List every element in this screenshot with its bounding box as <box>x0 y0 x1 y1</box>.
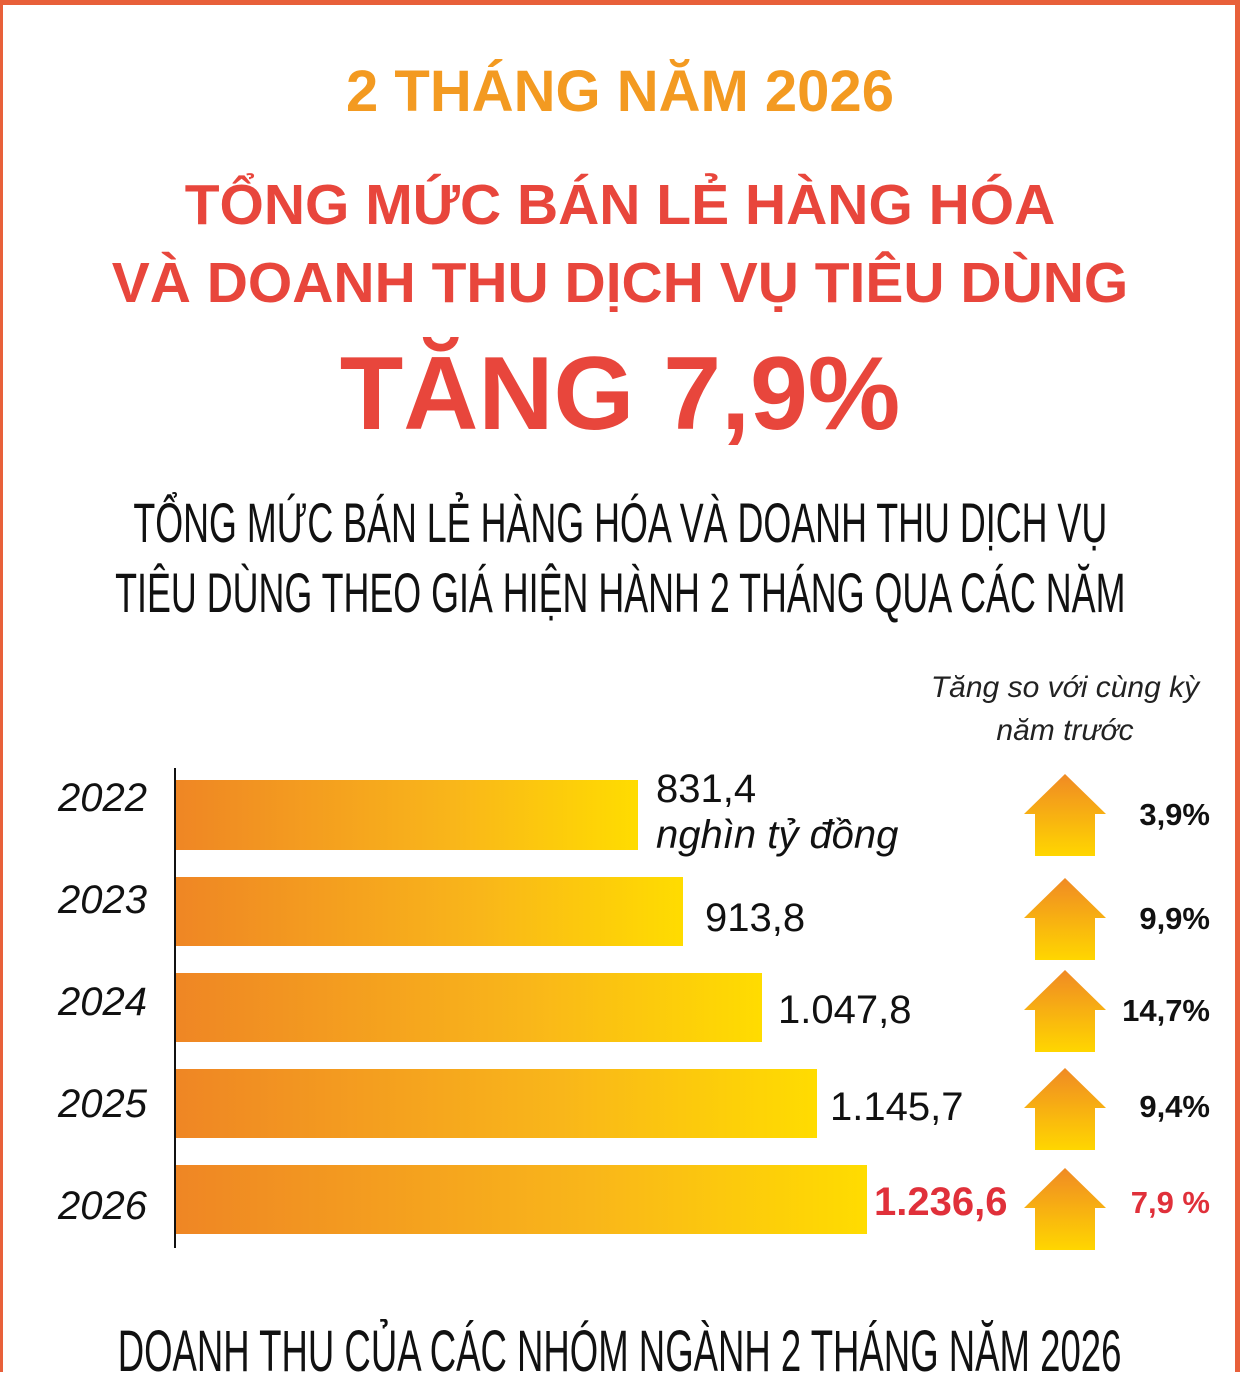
bar chart: 2022 <box>58 776 147 820</box>
title: main: TỔNG MỨC BÁN LẺ HÀNG HÓA <box>185 173 1055 237</box>
bar chart: 831,4 <box>656 767 756 811</box>
arrow 2026 <box>1024 1168 1210 1250</box>
subtitle: TỔNG MỨC BÁN LẺ HÀNG HÓA VÀ DOANH THU DỊCH VỤ <box>133 491 1107 554</box>
row 2023 <box>58 877 805 946</box>
arrow 2024 <box>1024 970 1210 1052</box>
row 2022 <box>58 767 898 857</box>
row 2026 <box>58 1165 1007 1234</box>
growth arrows: 14,7% <box>1122 993 1210 1028</box>
growth arrows: 3,9% <box>1139 797 1210 832</box>
bar chart <box>58 767 1007 1248</box>
legend note <box>931 671 1201 747</box>
title: period: 2 THÁNG NĂM 2026 <box>346 59 894 124</box>
section heading: DOANH THU CỦA CÁC NHÓM NGÀNH 2 THÁNG NĂM 2026 <box>118 1319 1122 1384</box>
title: main: VÀ DOANH THU DỊCH VỤ TIÊU DÙNG <box>112 251 1128 315</box>
arrow 2023 <box>1024 878 1210 960</box>
arrow 2025 <box>1024 1068 1210 1150</box>
bar chart: nghìn tỷ đồng <box>656 813 898 857</box>
growth arrows: 7,9 % <box>1131 1185 1210 1220</box>
growth arrows: 9,4% <box>1139 1089 1210 1124</box>
growth arrows: 9,9% <box>1139 901 1210 936</box>
bar chart: 1.047,8 <box>778 988 911 1032</box>
subtitle: TIÊU DÙNG THEO GIÁ HIỆN HÀNH 2 THÁNG QUA CÁC NĂM <box>115 561 1125 624</box>
bar chart: 2026 <box>58 1184 147 1228</box>
title: main <box>112 173 1128 315</box>
legend note: Tăng so với cùng kỳ <box>931 671 1199 704</box>
bar chart: 1.145,7 <box>830 1085 963 1129</box>
subtitle <box>115 491 1125 624</box>
row 2024 <box>58 973 911 1042</box>
bar chart: 1.236,6 <box>874 1180 1007 1224</box>
bar chart: 2024 <box>58 980 147 1024</box>
legend note: năm trước <box>996 714 1134 747</box>
row 2025 <box>58 1069 963 1138</box>
headline number: TĂNG 7,9% <box>340 336 900 452</box>
arrow 2022 <box>1024 774 1210 856</box>
bar chart: 2023 <box>58 878 147 922</box>
bar chart: 2025 <box>58 1082 147 1126</box>
growth arrows <box>1024 774 1210 1250</box>
bar chart: 913,8 <box>705 896 805 940</box>
